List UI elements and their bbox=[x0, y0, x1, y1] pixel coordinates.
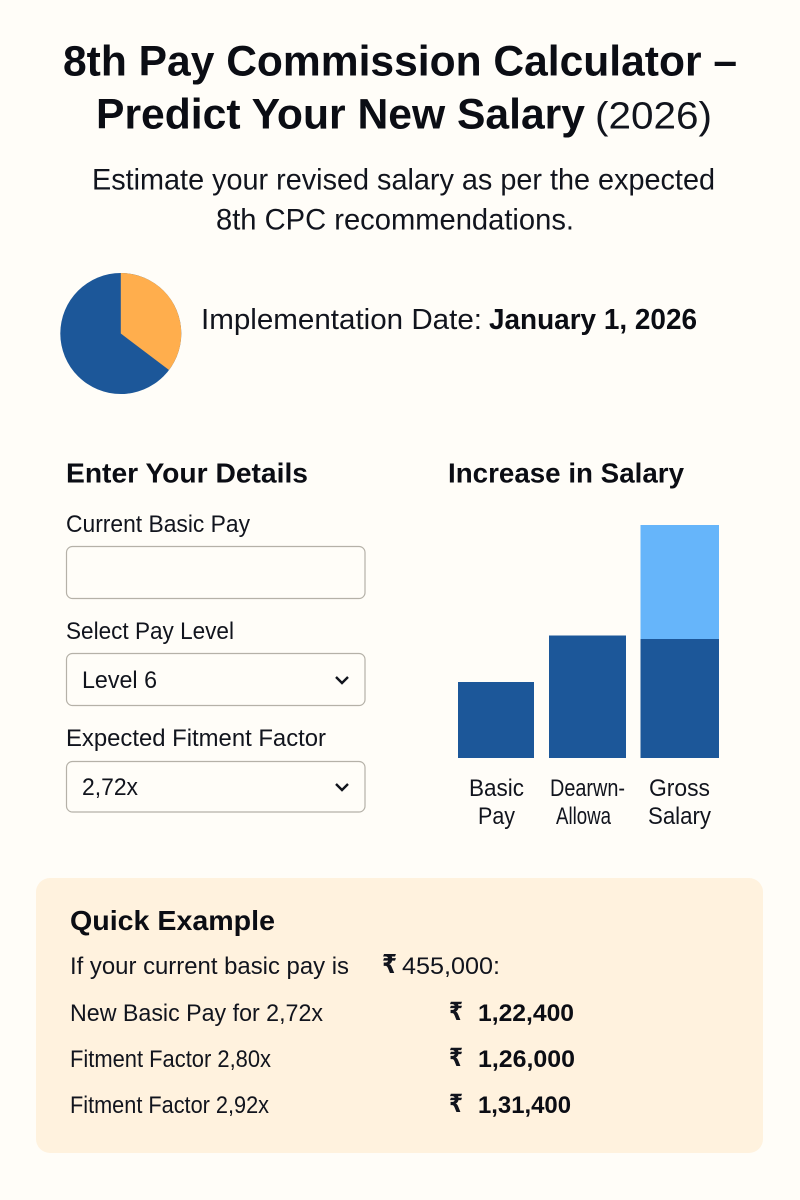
bar label: basic pay bbox=[469, 775, 524, 830]
bar label: gross salary bbox=[648, 775, 711, 830]
bar label: dearwn allowa: Dearwn- bbox=[550, 775, 625, 802]
bar: basic pay bbox=[458, 682, 534, 758]
title: (2026) bbox=[595, 96, 712, 138]
heading: increase in salary: Increase in Salary bbox=[448, 458, 684, 488]
dropdown: fitment factor: 2,72x bbox=[82, 774, 138, 801]
label: expected fitment factor: Expected Fitment Factor bbox=[66, 725, 326, 752]
row: 2.72x bbox=[70, 997, 574, 1027]
implementation date bbox=[201, 304, 697, 336]
subtitle: 8th CPC recommendations. bbox=[216, 204, 574, 236]
intro line bbox=[70, 950, 500, 980]
bar label: dearwn allowa: Allowa bbox=[556, 803, 612, 830]
subtitle bbox=[92, 164, 715, 236]
label: select pay level: Select Pay Level bbox=[66, 618, 234, 645]
bar label: basic pay: Basic bbox=[469, 775, 524, 802]
title bbox=[63, 38, 737, 138]
implementation date: January 1, 2026 bbox=[489, 304, 697, 336]
title: Predict Your New Salary bbox=[96, 90, 585, 138]
intro line: If your current basic pay is bbox=[70, 953, 349, 980]
input: current basic pay bbox=[66, 546, 365, 598]
bar: dearness allowance bbox=[549, 636, 626, 758]
label: current basic pay: Current Basic Pay bbox=[66, 511, 250, 538]
intro line: 455,000: bbox=[402, 953, 500, 980]
dropdown: pay level: Level 6 bbox=[82, 667, 157, 694]
bar label: basic pay: Pay bbox=[478, 803, 515, 830]
bar label: gross salary: Gross bbox=[649, 775, 710, 802]
subtitle: Estimate your revised salary as per the expected bbox=[92, 164, 715, 196]
dropdown: fitment factor bbox=[66, 762, 365, 812]
row: 2.92x bbox=[70, 1089, 571, 1119]
title: 8th Pay Commission Calculator – bbox=[63, 38, 737, 86]
intro line: ₹ bbox=[382, 950, 397, 980]
dropdown: pay level bbox=[66, 654, 365, 706]
row: 2.80x: Fitment Factor 2,80x bbox=[70, 1046, 271, 1073]
heading: enter your details: Enter Your Details bbox=[66, 458, 308, 488]
panel: increase in salary bbox=[448, 458, 719, 830]
row: 2.72x: New Basic Pay for 2,72x bbox=[70, 1000, 323, 1027]
panel: enter your details bbox=[66, 458, 365, 812]
row: 2.72x: ₹ bbox=[449, 997, 463, 1026]
row: 2.80x: ₹ bbox=[449, 1043, 463, 1072]
row: 2.92x: 1,31,400 bbox=[478, 1092, 571, 1119]
heading: quick example: Quick Example bbox=[70, 905, 275, 936]
row: 2.80x bbox=[70, 1043, 575, 1073]
bar label: gross salary: Salary bbox=[648, 803, 711, 830]
row: 2.80x: 1,26,000 bbox=[478, 1046, 575, 1073]
row: 2.92x: ₹ bbox=[449, 1089, 463, 1118]
bar label: dearwn allowa bbox=[550, 775, 625, 830]
row: 2.92x: Fitment Factor 2,92x bbox=[70, 1092, 269, 1119]
row: 2.72x: 1,22,400 bbox=[478, 1000, 574, 1027]
implementation date: Implementation Date: bbox=[201, 304, 482, 336]
bar: gross salary bbox=[640, 525, 719, 758]
panel: quick example bbox=[36, 878, 763, 1153]
pie chart bbox=[60, 273, 181, 394]
